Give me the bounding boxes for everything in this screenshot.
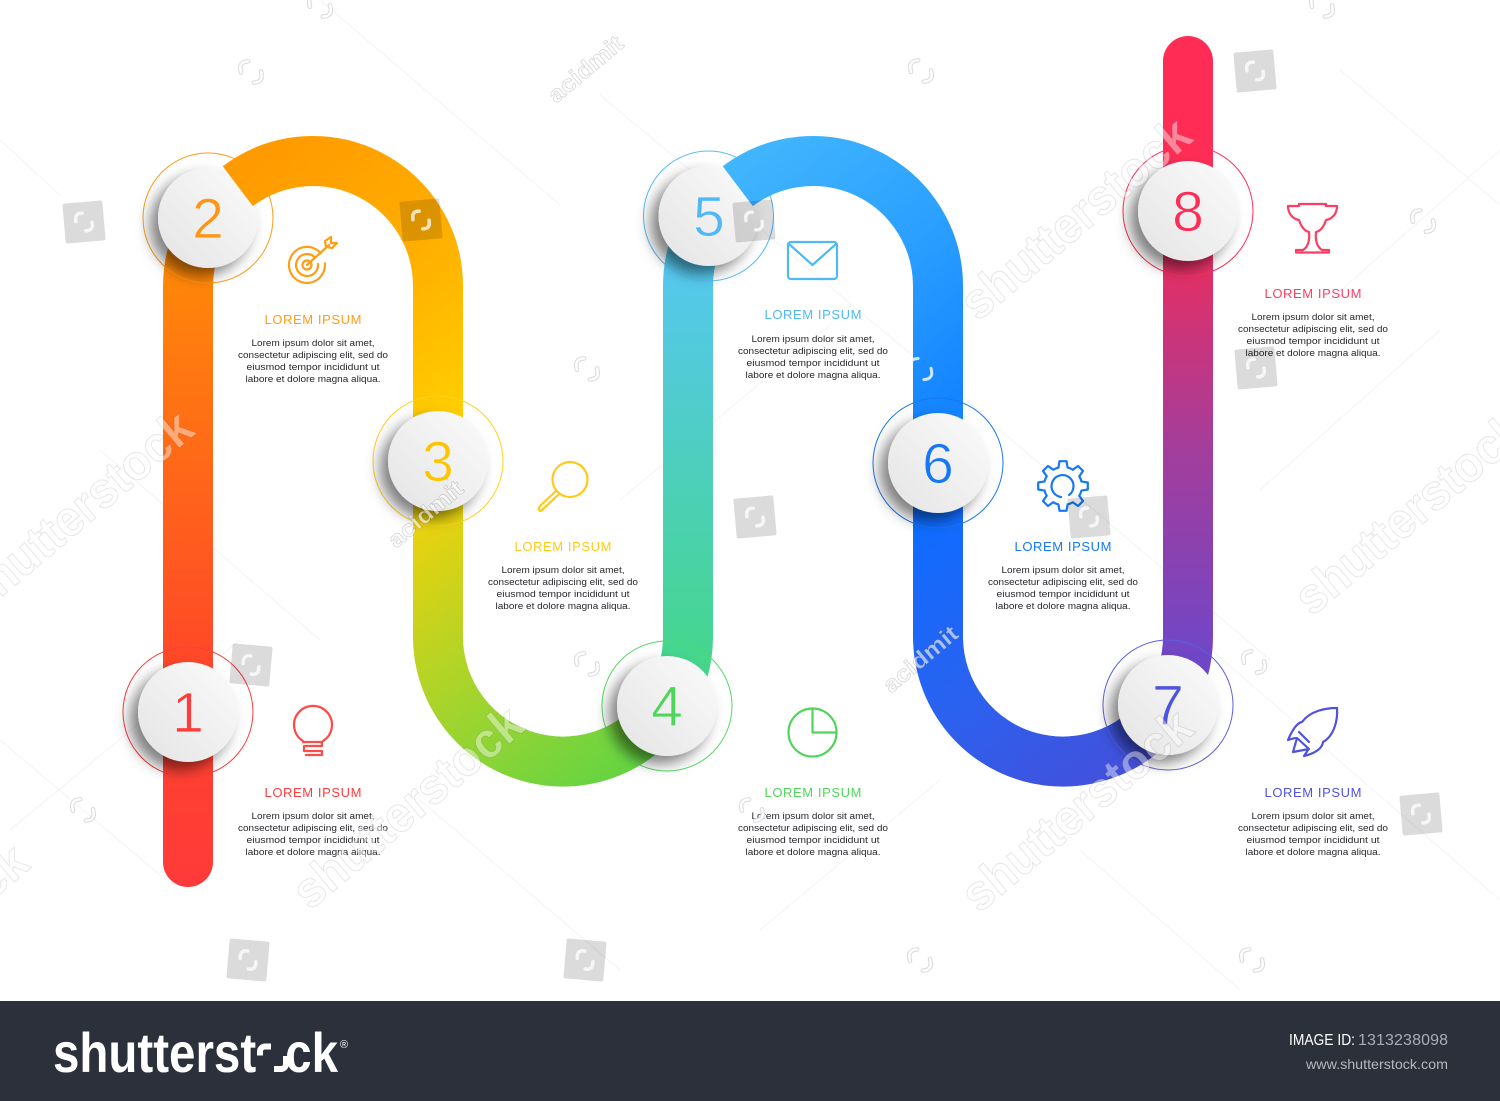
step 5 marker: 5 xyxy=(693,185,725,249)
road segment 4 xyxy=(671,233,700,699)
text block: step 5 xyxy=(738,307,888,381)
step 8 marker xyxy=(1123,146,1253,276)
text block: step 6: labore et dolore magna aliqua. xyxy=(996,601,1130,612)
text block: step 4: Lorem ipsum dolor sit amet, xyxy=(752,811,874,822)
text block: step 8: consectetur adipiscing elit, sed do xyxy=(1238,324,1388,335)
text block: step 5: LOREM IPSUM xyxy=(764,307,862,322)
watermark: shutterstock diagonal text: shutterstock xyxy=(950,698,1203,922)
footer image id: 1313238098 xyxy=(1358,1032,1448,1049)
text block: step 4 xyxy=(738,785,888,858)
text block: step 3: LOREM IPSUM xyxy=(514,539,612,554)
step 1 marker xyxy=(123,647,253,777)
step 6 marker xyxy=(873,398,1003,528)
watermark: shutterstock diagonal text: shutterstock xyxy=(949,106,1202,330)
icon: pie chart xyxy=(788,708,836,756)
icon: envelope xyxy=(788,242,837,279)
text block: step 6: Lorem ipsum dolor sit amet, xyxy=(1002,565,1124,576)
watermark: acidmit text: acidmit xyxy=(878,620,963,698)
step 6 marker: 6 xyxy=(922,432,954,496)
text block: step 3: labore et dolore magna aliqua. xyxy=(496,601,630,612)
text block: step 8: eiusmod tempor incididunt ut xyxy=(1246,336,1380,347)
footer bar xyxy=(0,1001,1500,1101)
icon: magnifier xyxy=(539,462,588,511)
icon: trophy xyxy=(1288,204,1337,252)
text block: step 2: consectetur adipiscing elit, sed do xyxy=(238,350,388,361)
text block: step 5: labore et dolore magna aliqua. xyxy=(746,370,880,381)
text block: step 4: LOREM IPSUM xyxy=(764,785,862,800)
text block: step 7: eiusmod tempor incididunt ut xyxy=(1246,835,1380,846)
text block: step 3: eiusmod tempor incididunt ut xyxy=(496,589,630,600)
text block: step 7: Lorem ipsum dolor sit amet, xyxy=(1252,811,1374,822)
text block: step 6: eiusmod tempor incididunt ut xyxy=(996,589,1130,600)
text block: step 2: labore et dolore magna aliqua. xyxy=(246,374,380,385)
text block: step 8 xyxy=(1238,286,1388,359)
text block: step 8: labore et dolore magna aliqua. xyxy=(1246,348,1380,359)
watermark: shutterstock diagonal text: shutterstock xyxy=(281,695,534,919)
text block: step 1: consectetur adipiscing elit, sed do xyxy=(238,823,388,834)
text block: step 3 xyxy=(488,539,638,612)
watermark: acidmit text: acidmit xyxy=(543,30,628,108)
footer url: www.shutterstock.com xyxy=(1305,1056,1448,1072)
step 5 marker xyxy=(644,151,774,281)
text block: step 2: Lorem ipsum dolor sit amet, xyxy=(252,338,374,349)
text block: step 8: LOREM IPSUM xyxy=(1264,286,1362,301)
text block: step 1: labore et dolore magna aliqua. xyxy=(246,847,380,858)
text block: step 3: consectetur adipiscing elit, sed do xyxy=(488,577,638,588)
road segment 3 xyxy=(438,461,671,762)
watermark: grey stamp squares xyxy=(62,49,1443,982)
step 2 marker: 2 xyxy=(192,187,224,251)
text block: step 7 xyxy=(1238,785,1388,858)
road segment 5 xyxy=(738,161,938,463)
text block: step 4: labore et dolore magna aliqua. xyxy=(746,847,880,858)
text block: step 7: LOREM IPSUM xyxy=(1264,785,1362,800)
text block: step 3: Lorem ipsum dolor sit amet, xyxy=(502,565,624,576)
step 8 marker: 8 xyxy=(1172,180,1204,244)
footer logo: ® xyxy=(340,1039,348,1051)
text block: step 6: LOREM IPSUM xyxy=(1014,539,1112,554)
road segment 7 to top xyxy=(1171,61,1188,700)
footer logo: shutterstock xyxy=(53,1021,339,1084)
text block: step 7: consectetur adipiscing elit, sed do xyxy=(1238,823,1388,834)
icon: light bulb xyxy=(294,706,332,755)
step 7 marker: 7 xyxy=(1152,674,1184,738)
footer image id xyxy=(1289,1032,1448,1049)
text block: step 4: consectetur adipiscing elit, sed do xyxy=(738,823,888,834)
step 4 marker: 4 xyxy=(651,675,683,739)
text block: step 1 xyxy=(238,785,388,858)
text block: step 4: eiusmod tempor incididunt ut xyxy=(746,835,880,846)
text block: step 5: Lorem ipsum dolor sit amet, xyxy=(752,334,874,345)
text block: step 6 xyxy=(988,539,1138,612)
text block: step 2: LOREM IPSUM xyxy=(264,312,362,327)
text block: step 6: consectetur adipiscing elit, sed do xyxy=(988,577,1138,588)
watermark: acidmit text: acidmit xyxy=(383,475,468,553)
text block: step 2 xyxy=(238,312,388,385)
text block: step 5: consectetur adipiscing elit, sed do xyxy=(738,346,888,357)
text block: step 1: eiusmod tempor incididunt ut xyxy=(246,835,380,846)
text block: step 7: labore et dolore magna aliqua. xyxy=(1246,847,1380,858)
step 1 marker: 1 xyxy=(172,681,204,745)
step 7 marker xyxy=(1103,640,1233,770)
text block: step 1: Lorem ipsum dolor sit amet, xyxy=(252,811,374,822)
road segment 6 xyxy=(938,463,1171,762)
text block: step 5: eiusmod tempor incididunt ut xyxy=(746,358,880,369)
icon: rocket xyxy=(1288,708,1337,756)
text block: step 1: LOREM IPSUM xyxy=(264,785,362,800)
road segment 2 xyxy=(238,161,438,461)
road segment 1 xyxy=(188,233,200,862)
icon: gear xyxy=(1038,461,1088,511)
step 4 marker xyxy=(602,641,732,771)
footer image id: IMAGE ID: xyxy=(1289,1032,1355,1049)
step 3 marker xyxy=(373,396,503,526)
step 3 marker: 3 xyxy=(422,430,454,494)
road top cap xyxy=(1163,36,1213,61)
text block: step 8: Lorem ipsum dolor sit amet, xyxy=(1252,312,1374,323)
step 2 marker xyxy=(143,153,273,283)
watermark: acidmit text xyxy=(383,30,963,698)
icon: target with arrow xyxy=(289,237,337,283)
text block: step 2: eiusmod tempor incididunt ut xyxy=(246,362,380,373)
